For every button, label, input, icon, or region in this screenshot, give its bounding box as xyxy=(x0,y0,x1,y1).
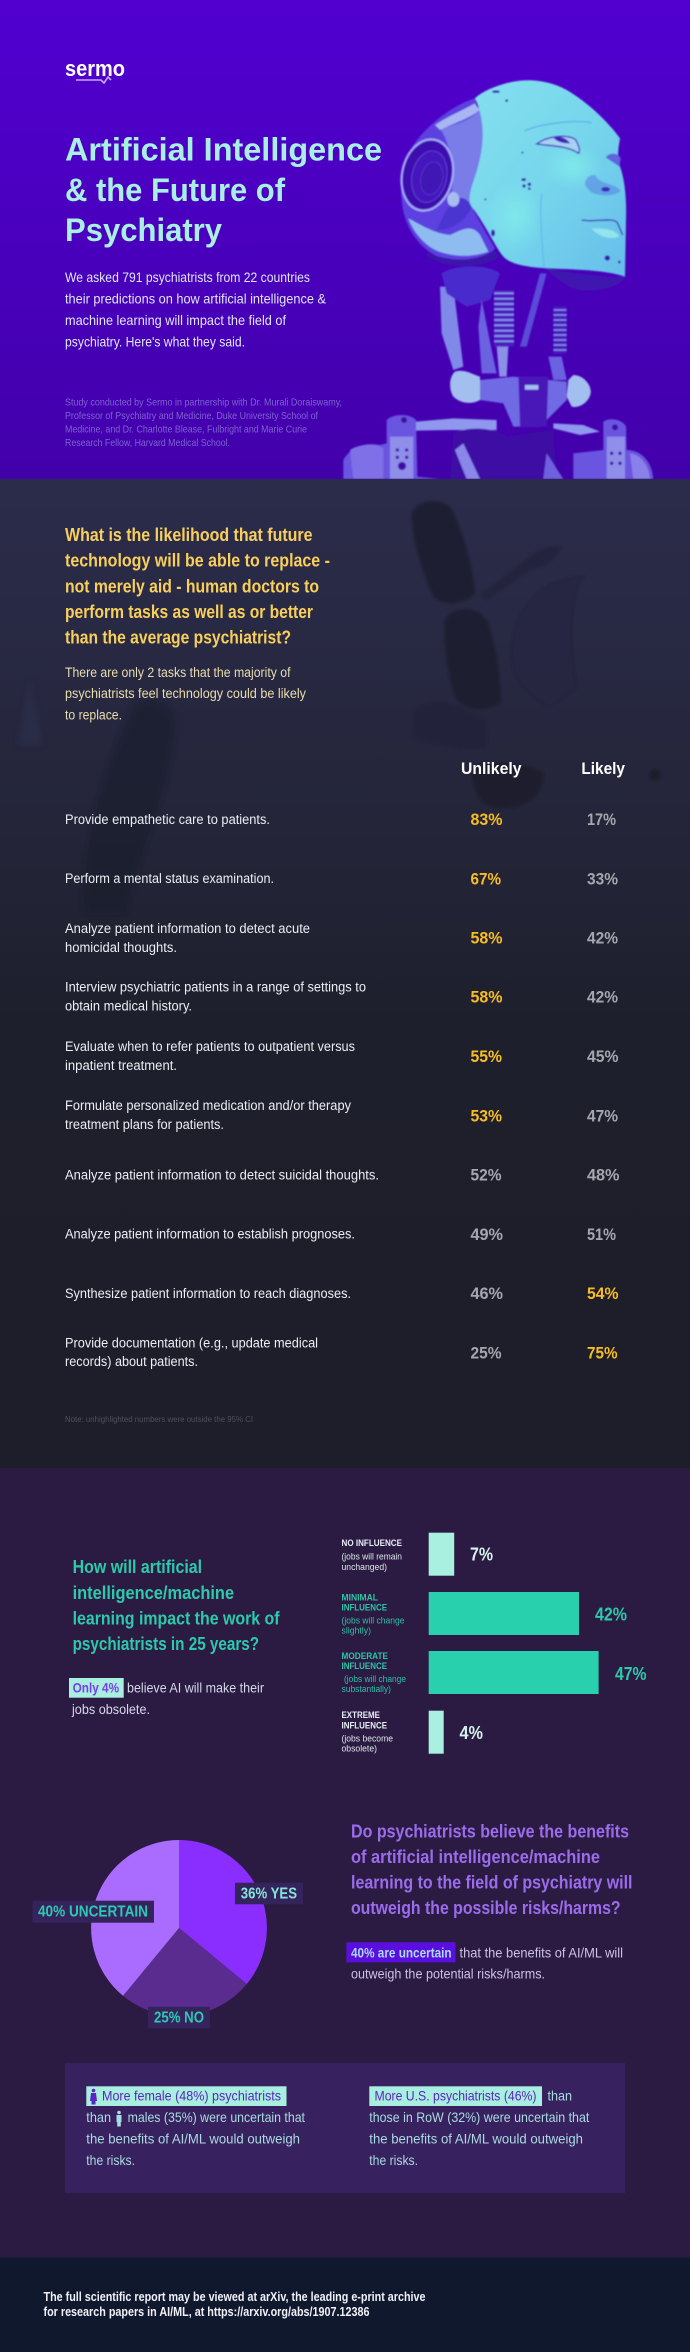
title xyxy=(65,132,382,248)
panel background xyxy=(65,2063,625,2193)
row: treatment plans xyxy=(65,1098,618,1132)
row: documentation: Provide documentation (e.g., update medical xyxy=(65,1335,318,1350)
row: refer patients xyxy=(65,1039,619,1073)
label: 36% yes xyxy=(235,1883,303,1904)
panel: replacement likelihood table xyxy=(0,479,690,1468)
row: treatment plans: treatment plans for patients. xyxy=(65,1117,224,1132)
bar: extreme influence 4%: INFLUENCE xyxy=(342,1721,387,1731)
heading: benefits vs risks: outweigh the possible risks/harms? xyxy=(351,1898,621,1918)
bar: minimal influence 42%: 42% xyxy=(595,1605,627,1625)
row: treatment plans: 53% xyxy=(470,1107,502,1125)
heading: work impact: psychiatrists in 25 years? xyxy=(73,1634,259,1654)
title: & the Future of xyxy=(65,172,285,208)
row: suicidal thoughts: 48% xyxy=(587,1167,620,1185)
column headers: Likely xyxy=(581,759,625,778)
row: mental status examination xyxy=(65,870,618,888)
hero background xyxy=(0,0,690,480)
title: Psychiatry xyxy=(65,212,222,248)
row: prognoses: 51% xyxy=(587,1226,616,1244)
panel: hero xyxy=(0,0,690,480)
bar: no influence 7%: 7% xyxy=(470,1545,493,1565)
table note: Note: unhighlighted numbers were outside the 95% CI xyxy=(65,1414,253,1424)
bar: minimal influence 42%: MINIMAL xyxy=(342,1593,378,1603)
logo: sermo: sermo xyxy=(65,56,125,81)
intro text: psychiatry. Here's what they said. xyxy=(65,334,245,350)
text block: U.S. vs RoW xyxy=(369,2086,589,2168)
bar: minimal influence 42%: slightly) xyxy=(342,1626,371,1636)
bar: moderate influence 47%: MODERATE xyxy=(342,1651,388,1661)
text block: female vs male: More female (48%) psychiatrists xyxy=(102,2088,281,2104)
row: mental status examination: 33% xyxy=(587,870,618,888)
label: 40% uncertain xyxy=(32,1901,154,1923)
heading: work impact xyxy=(73,1557,280,1654)
row: empathetic care: 83% xyxy=(470,811,503,829)
row: homicidal thoughts: Analyze patient information to detect acute xyxy=(65,921,310,936)
illustration: robot head xyxy=(343,80,653,479)
bar: no influence 7%: unchanged) xyxy=(342,1562,387,1572)
bar: moderate influence 47%: INFLUENCE xyxy=(342,1661,387,1671)
row: homicidal thoughts xyxy=(65,921,618,955)
row: refer patients: 55% xyxy=(470,1048,502,1066)
callout: only 4%: Only 4% xyxy=(73,1680,120,1696)
row: mental status examination: Perform a mental status examination. xyxy=(65,871,274,886)
purple background xyxy=(0,1468,690,2258)
text block: U.S. vs RoW: those in RoW (32%) were uncertain that xyxy=(369,2109,589,2125)
bar: moderate influence 47%: substantially) xyxy=(342,1684,391,1694)
bar: moderate influence 47% xyxy=(342,1651,646,1694)
row: documentation: 25% xyxy=(470,1344,502,1362)
callout: 40% are uncertain: 40% are uncertain xyxy=(351,1944,452,1960)
question heading: than the average psychiatrist? xyxy=(65,628,291,648)
row: treatment plans: Formulate personalized medication and/or therapy xyxy=(65,1098,351,1113)
study credit: Research Fellow, Harvard Medical School. xyxy=(65,437,230,449)
row: interview patients xyxy=(65,980,618,1014)
row: documentation: records) about patients. xyxy=(65,1354,198,1369)
row: suicidal thoughts: 52% xyxy=(470,1167,502,1185)
heading: benefits vs risks: of artificial intelligence/machine xyxy=(351,1847,600,1867)
heading: work impact: How will artificial xyxy=(73,1557,202,1577)
bar: minimal influence 42%: INFLUENCE xyxy=(342,1603,387,1613)
text block: female vs male: the risks. xyxy=(86,2152,135,2168)
intro text xyxy=(65,269,327,350)
row: interview patients: Interview psychiatric patients in a range of settings to xyxy=(65,980,366,995)
question heading: not merely aid - human doctors to xyxy=(65,576,319,596)
bar: no influence 7%: NO INFLUENCE xyxy=(342,1538,402,1548)
footer text: The full scientific report may be viewed at arXiv, the leading e-print archive xyxy=(44,2290,426,2304)
row: prognoses xyxy=(65,1226,616,1244)
study credit xyxy=(65,396,342,449)
row: suicidal thoughts: Analyze patient information to detect suicidal thoughts. xyxy=(65,1168,379,1182)
row: treatment plans: 47% xyxy=(587,1107,618,1125)
bar: no influence 7%: (jobs will remain xyxy=(342,1552,402,1562)
text block: female vs male xyxy=(86,2086,305,2168)
footer background xyxy=(0,2258,690,2352)
row: refer patients: 45% xyxy=(587,1048,619,1066)
footer text xyxy=(44,2290,426,2319)
intro text: machine learning will impact the field of xyxy=(65,312,286,328)
row: suicidal thoughts xyxy=(65,1167,620,1185)
study credit: Professor of Psychiatry and Medicine, Duke University School of xyxy=(65,410,318,422)
row: interview patients: 42% xyxy=(587,989,618,1007)
row: homicidal thoughts: 58% xyxy=(470,930,503,948)
panel: footer xyxy=(0,2258,690,2352)
row: prognoses: 49% xyxy=(470,1226,503,1244)
title: Artificial Intelligence xyxy=(65,132,382,168)
icon: male person xyxy=(116,2111,122,2126)
callout: 40% are uncertain xyxy=(346,1942,623,1982)
question heading xyxy=(65,525,330,648)
text block: U.S. vs RoW: More U.S. psychiatrists (46%) xyxy=(374,2088,536,2104)
icon: female person xyxy=(90,2089,97,2104)
row: empathetic care xyxy=(65,811,616,829)
sub text: psychiatrists feel technology could be likely xyxy=(65,686,306,701)
row: homicidal thoughts: homicidal thoughts. xyxy=(65,940,177,955)
label: 40% uncertain: 40% UNCERTAIN xyxy=(38,1904,148,1921)
slice: yes 36% xyxy=(179,1840,267,1984)
study credit: Study conducted by Sermo in partnership with Dr. Murali Doraiswamy, xyxy=(65,396,342,408)
row: empathetic care: Provide empathetic care to patients. xyxy=(65,812,270,827)
panel: purple survey section xyxy=(0,1468,690,2258)
row: homicidal thoughts: 42% xyxy=(587,930,618,948)
text block: female vs male: males (35%) were uncertain that xyxy=(128,2109,305,2125)
sub text xyxy=(65,665,306,722)
question heading: technology will be able to replace - xyxy=(65,551,330,571)
column headers xyxy=(461,759,625,778)
bar: minimal influence 42% xyxy=(342,1592,627,1636)
text block: female vs male: the benefits of AI/ML would outweigh xyxy=(86,2131,300,2147)
sub text: There are only 2 tasks that the majority of xyxy=(65,665,291,680)
label: 25% no xyxy=(148,2007,210,2028)
callout: 40% are uncertain: that the benefits of AI/ML will xyxy=(460,1944,623,1960)
bar: moderate influence 47%: 47% xyxy=(615,1664,646,1684)
heading: benefits vs risks: learning to the field of psychiatry will xyxy=(351,1872,632,1892)
label: 25% no: 25% NO xyxy=(154,2010,204,2027)
panel: uncertainty breakdown xyxy=(65,2063,625,2193)
bar: extreme influence 4%: obsolete) xyxy=(342,1744,377,1754)
question heading: What is the likelihood that future xyxy=(65,525,312,545)
footer text: for research papers in AI/ML, at https://arxiv.org/abs/1907.12386 xyxy=(44,2305,370,2319)
background photo: faded patient silhouette xyxy=(18,680,176,913)
row: diagnoses: 46% xyxy=(470,1285,503,1303)
callout: only 4% xyxy=(69,1678,264,1717)
heading: benefits vs risks xyxy=(351,1822,632,1918)
text block: U.S. vs RoW: the benefits of AI/ML would outweigh xyxy=(369,2131,583,2147)
sub text: to replace. xyxy=(65,708,122,722)
bar: extreme influence 4%: EXTREME xyxy=(342,1710,380,1720)
background photo: faded robot xyxy=(412,501,660,808)
text block: U.S. vs RoW: the risks. xyxy=(369,2152,418,2168)
slice: uncertain 40% xyxy=(91,1840,179,1996)
heading: work impact: learning impact the work of xyxy=(73,1609,280,1629)
slice: no 25% xyxy=(123,1928,247,2016)
label: 36% yes: 36% YES xyxy=(241,1886,297,1903)
bar: extreme influence 4%: (jobs become xyxy=(342,1734,393,1744)
bar: no influence 7% xyxy=(342,1533,493,1576)
dark background xyxy=(0,479,690,1468)
bar: extreme influence 4% xyxy=(342,1710,483,1754)
row: documentation xyxy=(65,1335,618,1369)
row: documentation: 75% xyxy=(587,1344,618,1362)
callout: only 4%: jobs obsolete. xyxy=(71,1701,150,1717)
bar: extreme influence 4%: 4% xyxy=(460,1723,483,1743)
bar: moderate influence 47%: (jobs will change xyxy=(344,1674,406,1684)
row: interview patients: 58% xyxy=(470,989,503,1007)
text block: U.S. vs RoW: than xyxy=(548,2088,572,2104)
robot neck with springs xyxy=(440,266,567,380)
row: refer patients: Evaluate when to refer patients to outpatient versus xyxy=(65,1039,355,1054)
robot face xyxy=(470,80,626,290)
intro text: We asked 791 psychiatrists from 22 countries xyxy=(65,269,310,285)
question heading: perform tasks as well as or better xyxy=(65,602,313,622)
bar: minimal influence 42%: (jobs will change xyxy=(342,1616,404,1626)
row: diagnoses: Synthesize patient information to reach diagnoses. xyxy=(65,1286,351,1301)
text block: female vs male: than xyxy=(86,2109,111,2125)
heading: benefits vs risks: Do psychiatrists believe the benefits xyxy=(351,1822,629,1842)
callout: only 4%: believe AI will make their xyxy=(127,1680,264,1696)
callout: 40% are uncertain: outweigh the potential risks/harms. xyxy=(351,1966,545,1982)
row: interview patients: obtain medical history. xyxy=(65,998,192,1014)
row: prognoses: Analyze patient information to establish prognoses. xyxy=(65,1227,355,1242)
column headers: Unlikely xyxy=(461,759,522,778)
row: diagnoses xyxy=(65,1285,619,1303)
row: diagnoses: 54% xyxy=(587,1285,619,1303)
robot base and shoulders xyxy=(343,415,653,479)
bar chart: influence on jobs xyxy=(342,1533,646,1754)
study credit: Medicine, and Dr. Charlotte Blease, Fulbright and Marie Curie xyxy=(65,424,307,436)
row: empathetic care: 17% xyxy=(587,811,616,829)
heading: work impact: intelligence/machine xyxy=(73,1583,234,1603)
row: refer patients: inpatient treatment. xyxy=(65,1058,177,1073)
row: mental status examination: 67% xyxy=(470,870,501,888)
robot back of head xyxy=(395,98,499,266)
intro text: their predictions on how artificial intelligence & xyxy=(65,290,327,306)
pie chart: benefits vs risks xyxy=(32,1840,303,2028)
robot collar xyxy=(450,371,591,427)
